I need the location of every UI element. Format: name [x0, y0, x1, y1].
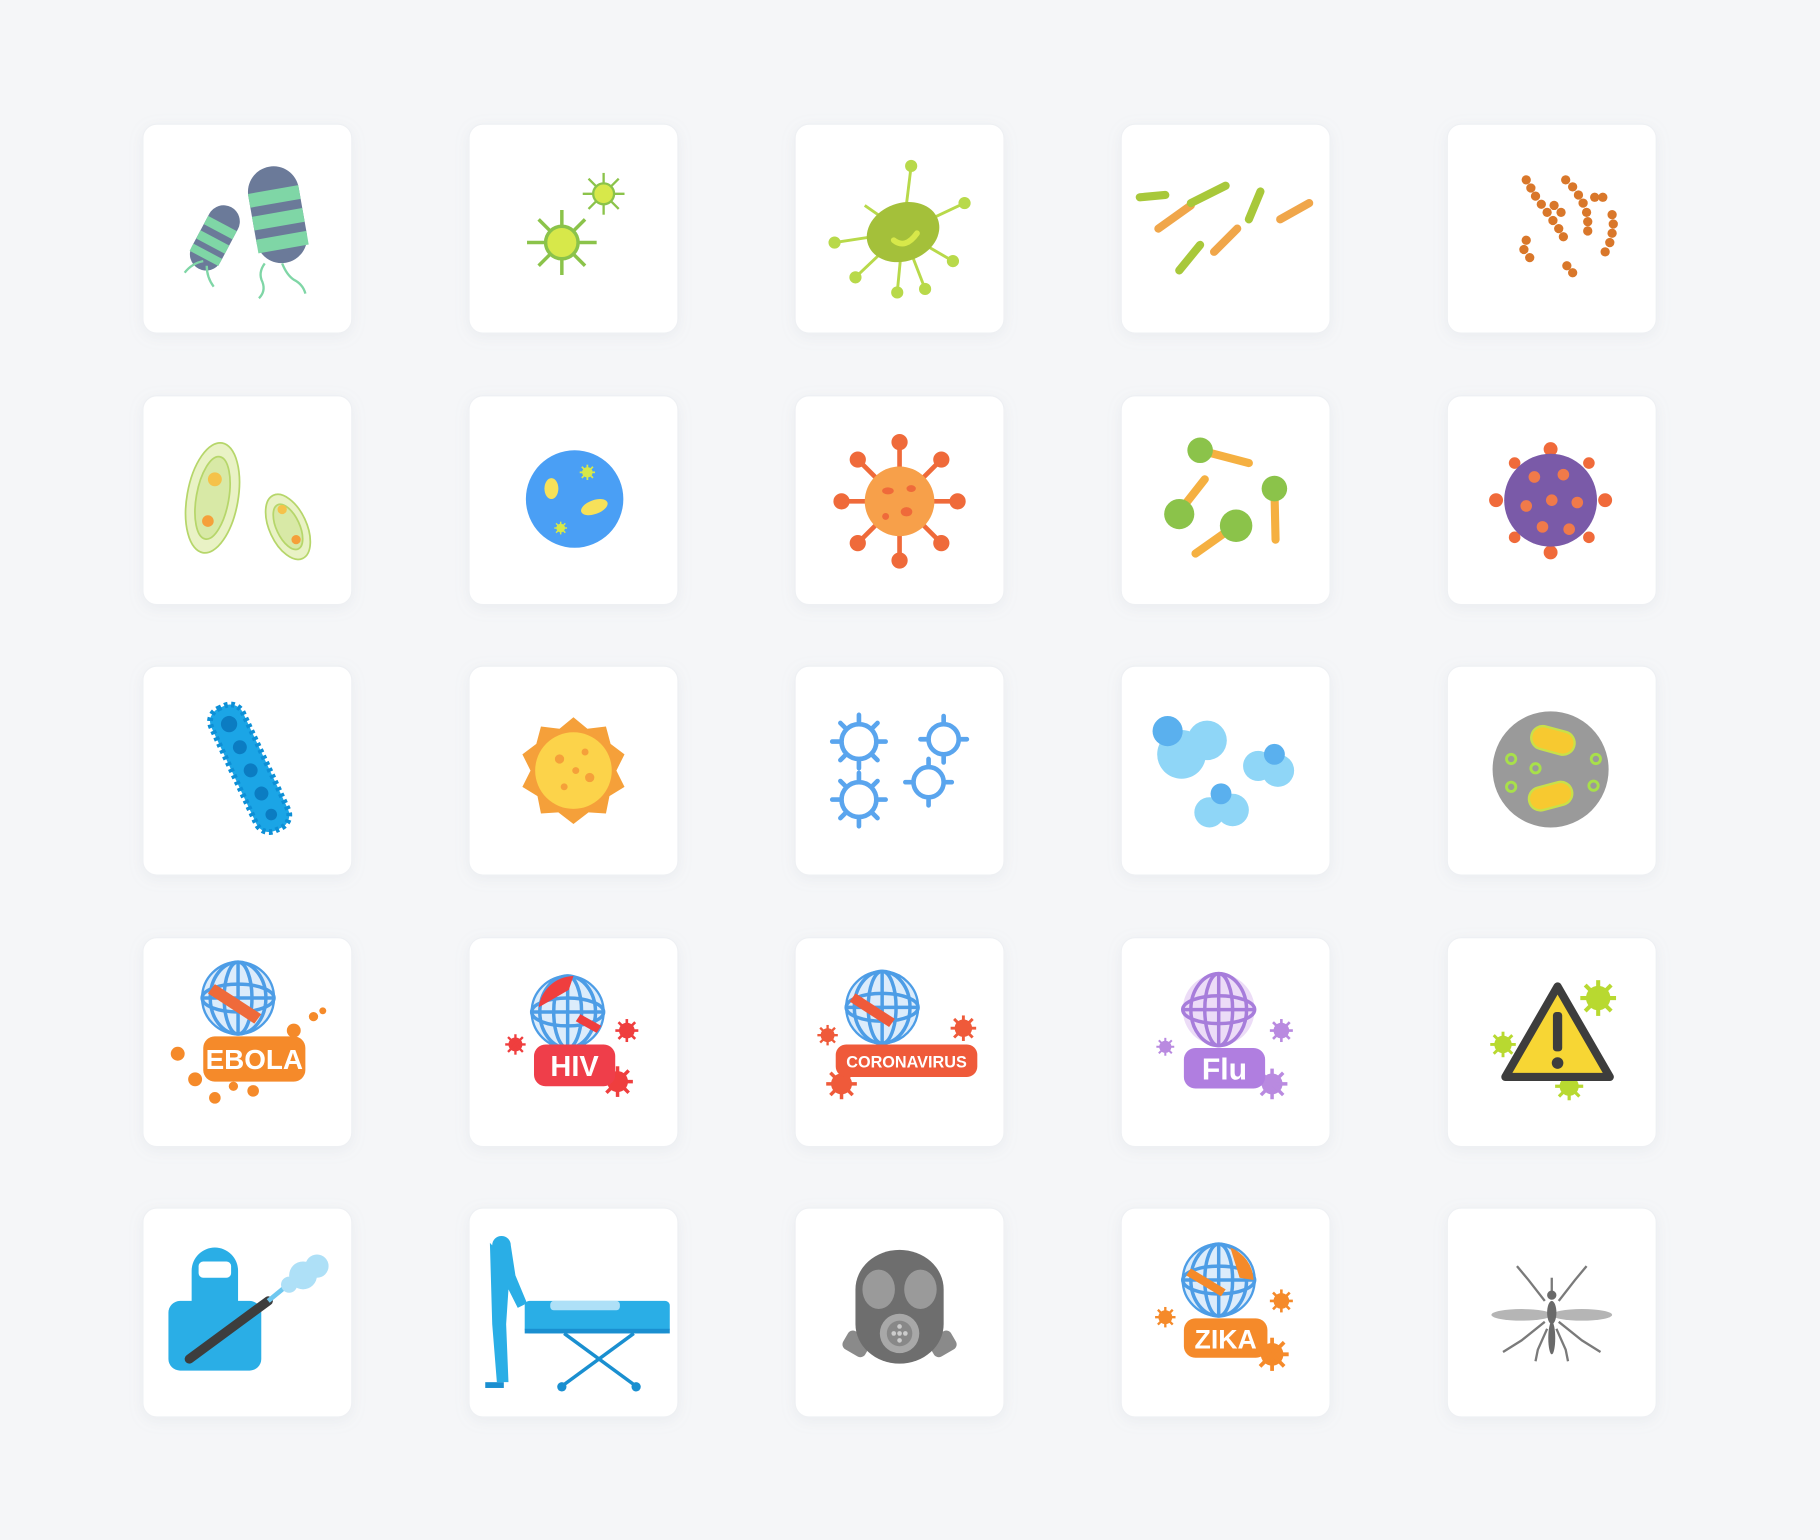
card: CORONAVIRUS — [795, 938, 1004, 1147]
card: orange sun cell — [469, 666, 678, 875]
card: blue gears — [795, 666, 1004, 875]
card: HIV — [469, 938, 678, 1147]
card: stretcher with figure — [469, 1208, 678, 1417]
card: green lollipops — [1121, 396, 1330, 605]
card: bacteria striped — [143, 124, 352, 333]
card: ZIKA: ZIKA — [1195, 1325, 1257, 1355]
card: HIV: HIV — [550, 1051, 599, 1083]
card: green virus blob — [795, 124, 1004, 333]
card: mosquito — [1447, 1208, 1656, 1417]
card: gray petri with pills — [1447, 666, 1656, 875]
card: blue rod chain — [143, 666, 352, 875]
card: chain cocci — [1447, 124, 1656, 333]
card: warning triangle — [1447, 938, 1656, 1147]
card: purple virus — [1447, 396, 1656, 605]
card: paramecium cells — [143, 396, 352, 605]
card: CORONAVIRUS: CORONAVIRUS — [846, 1054, 967, 1072]
card: orange virus — [795, 396, 1004, 605]
card: rod bacteria — [1121, 124, 1330, 333]
card: EBOLA: EBOLA — [206, 1044, 303, 1075]
card: Flu — [1121, 938, 1330, 1147]
card: gas mask — [795, 1208, 1004, 1417]
card: blue petri circle — [469, 396, 678, 605]
card: green spiky cells — [469, 124, 678, 333]
card: EBOLA — [143, 938, 352, 1147]
card: hazmat sprayer — [143, 1208, 352, 1417]
card: light blue clouds — [1121, 666, 1330, 875]
card: ZIKA — [1121, 1208, 1330, 1417]
card: Flu: Flu — [1202, 1053, 1247, 1086]
